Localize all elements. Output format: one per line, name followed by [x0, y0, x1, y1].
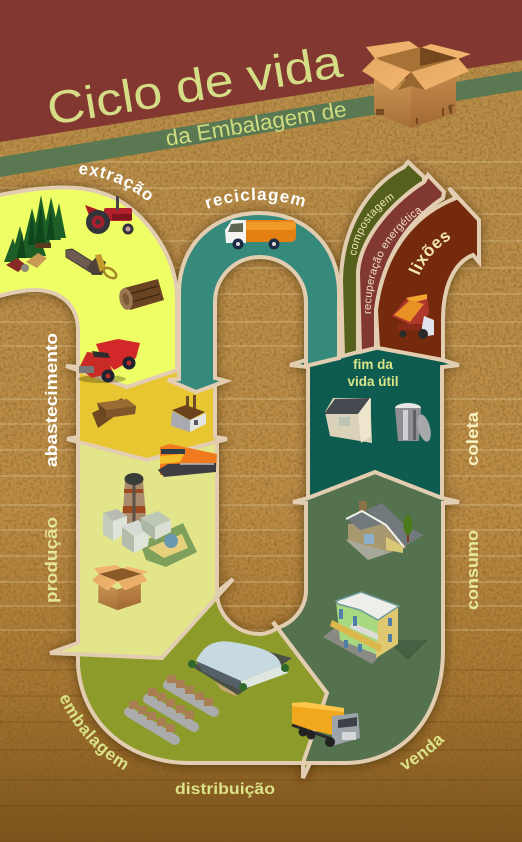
- icon: chainsaw: [66, 249, 118, 280]
- icon: small cardboard box: [92, 565, 149, 610]
- panel: abastecimento: [66, 366, 227, 460]
- icon: warehouse: [188, 641, 292, 697]
- icon: delivery truck: [292, 702, 360, 747]
- green ribbon: [0, 71, 522, 177]
- label: lixões: lixões: [408, 232, 450, 275]
- header banner: [0, 0, 522, 142]
- icon: small factory: [171, 395, 206, 432]
- icon: red dump truck: [78, 339, 140, 383]
- icon: tipper truck: [392, 294, 434, 339]
- icon: factory with chimney: [103, 473, 197, 567]
- label: consumo: consumo: [463, 530, 482, 610]
- label: abastecimento: abastecimento: [42, 333, 61, 467]
- label: reciclagem: reciclagem: [205, 188, 305, 209]
- label: distribuição: distribuição: [175, 781, 275, 798]
- title: Ciclo de vida: [43, 35, 346, 135]
- label: coleta: coleta: [463, 411, 482, 466]
- icon: trash can: [395, 403, 433, 443]
- label: extração: extração: [79, 165, 152, 200]
- subtitle: da Embalagem de: [164, 96, 348, 151]
- icon: dumpster: [324, 398, 372, 443]
- icon: locomotive: [158, 444, 217, 477]
- icon: tractor: [85, 196, 134, 234]
- icon: pine trees: [4, 195, 66, 272]
- label: embalagem: embalagem: [60, 695, 128, 770]
- icon: house: [346, 501, 424, 560]
- panel: fim da vida útil: [290, 346, 459, 498]
- panel: produção: [50, 439, 233, 658]
- panel: recuperação energética: [358, 175, 444, 352]
- label: compostagem: compostagem: [350, 194, 394, 255]
- label: fim da vida útil: vida útil: [347, 374, 399, 389]
- label: recuperação energética: recuperação energética: [365, 208, 422, 314]
- panel: compostagem: [341, 162, 424, 356]
- label: venda: venda: [400, 736, 445, 770]
- panel: reciclagem: [168, 213, 339, 392]
- label: fim da vida útil: fim da: [353, 357, 393, 372]
- flow diagram: [0, 162, 479, 778]
- panel: venda / consumo: [273, 472, 459, 763]
- icon: tree beside house: [404, 515, 412, 542]
- icon: log: [117, 279, 164, 311]
- panel: distribuição / embalagem: [78, 592, 327, 778]
- icon: large cardboard box: [362, 41, 471, 128]
- icon: wood planks: [92, 398, 136, 428]
- icon: garbage truck: [225, 220, 296, 250]
- icon: apartment building: [323, 592, 428, 664]
- label: produção: produção: [42, 517, 61, 603]
- icon: conveyor belts: [129, 675, 214, 740]
- panel: lixões: [376, 188, 479, 360]
- panel: extração: [0, 187, 189, 387]
